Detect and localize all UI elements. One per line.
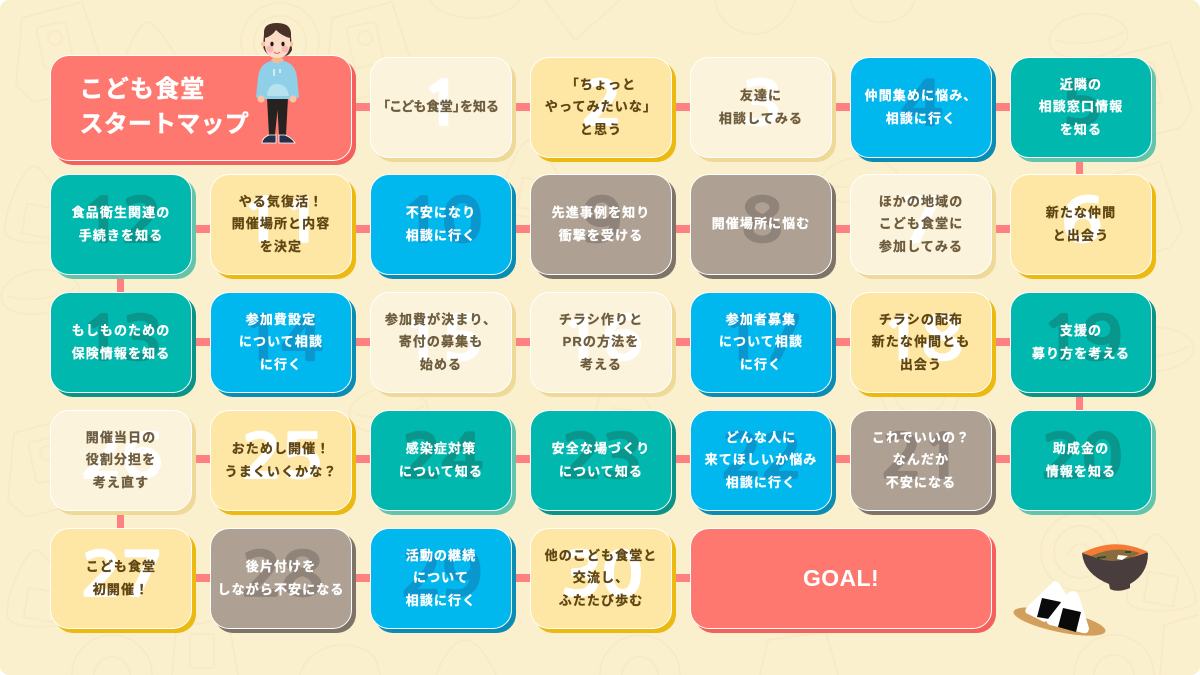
step 1: 1 [421, 75, 461, 134]
step 9: 先進事例を知り [552, 205, 650, 220]
step 10 [370, 174, 516, 279]
step 20: 20 [1041, 428, 1121, 487]
step 3: 相談してみる [719, 110, 803, 126]
step 11: を決定 [260, 239, 302, 254]
step 6: 新たな仲間 [1046, 205, 1116, 220]
step 15 [370, 292, 516, 397]
step 21: 不安になる [886, 475, 956, 490]
step 24 [370, 410, 516, 515]
step 28: しながら不安になる [218, 582, 344, 596]
step 11: 11 [241, 192, 321, 251]
connector path [51, 57, 1156, 634]
character: person in blue hoodie [256, 23, 299, 144]
step 14: 14 [241, 310, 321, 369]
step 22: 来てほしいか悩み [705, 452, 817, 467]
step 13: もしものための [72, 323, 170, 338]
step 26: 26 [81, 428, 161, 487]
step 11 [210, 174, 356, 279]
step 26 [50, 410, 196, 515]
step 21: これでいいの？ [872, 430, 970, 445]
step 9 [530, 174, 676, 279]
step 16 [530, 292, 676, 397]
step 23: 23 [561, 428, 641, 487]
step 18: 出会う [900, 357, 942, 372]
step 23: 安全な場づくり [552, 441, 650, 456]
step 4 [850, 57, 996, 162]
step 19 [1010, 292, 1156, 397]
goal panel: GOAL! [803, 565, 879, 591]
step 16: 16 [561, 310, 641, 369]
step 6 [1010, 174, 1156, 279]
step 26: 考え直す [93, 475, 149, 490]
step 14: 参加費設定 [246, 312, 316, 327]
title: こども食堂 [80, 76, 206, 103]
step 22: 相談に行く [726, 475, 796, 490]
step 7 [850, 174, 996, 279]
step 2: と思う [580, 122, 622, 137]
step 27: こども食堂 [86, 559, 156, 574]
step 21 [850, 410, 996, 515]
step 20: 情報を知る [1046, 464, 1116, 478]
step 27: 27 [81, 546, 161, 605]
step 15: 寄付の募集も [399, 334, 483, 349]
step 30 [530, 528, 676, 633]
step 17 [690, 292, 836, 397]
step 17: 17 [721, 310, 801, 369]
step 7: ほかの地域の [879, 194, 963, 209]
step 30: 他のこども食堂と [545, 548, 657, 563]
step 3 [690, 57, 836, 162]
step 15: 参加費が決まり、 [385, 312, 497, 327]
step 28 [210, 528, 356, 633]
step 17: 参加者募集 [726, 312, 796, 327]
step 26: 開催当日の [86, 430, 156, 445]
step 1 [370, 57, 516, 162]
step 15: 15 [401, 310, 481, 369]
step 9: 衝撃を受ける [559, 228, 643, 242]
step 17: について相談 [719, 334, 803, 349]
step 5: を知る [1060, 122, 1102, 137]
step 2: 2 [581, 75, 621, 134]
step 16: チラシ作りと [559, 312, 643, 327]
step 18: チラシの配布 [879, 312, 963, 327]
step 11: 開催場所と内容 [232, 216, 330, 231]
step 25 [210, 410, 356, 515]
step 16: PRの方法を [563, 334, 639, 349]
step 20 [1010, 410, 1156, 515]
step 19: 募り方を考える [1032, 346, 1130, 360]
step 23 [530, 410, 676, 515]
step 17: に行く [740, 357, 782, 372]
title panel [50, 55, 356, 165]
step 2: 「ちょっと [566, 77, 636, 92]
step 10: 10 [401, 192, 481, 251]
step 24: について知る [399, 464, 483, 478]
step 7: 7 [901, 192, 941, 251]
step 15: 始める [420, 357, 462, 372]
step 19: 19 [1041, 310, 1121, 369]
step 22 [690, 410, 836, 515]
step 7: こども食堂に [879, 216, 963, 231]
goal panel [690, 528, 996, 633]
step 1: 「こども食堂」を知る [383, 99, 499, 114]
step 25: おためし開催！ [232, 441, 330, 456]
step 14 [210, 292, 356, 397]
step 22: どんな人に [726, 430, 796, 445]
step 3: 3 [741, 75, 781, 134]
step 25: うまくいくかな？ [225, 464, 337, 478]
step 4: 4 [901, 75, 941, 134]
step 6: 6 [1061, 192, 1101, 251]
step 5 [1010, 57, 1156, 162]
step 30: 30 [561, 546, 641, 605]
step 24: 感染症対策 [406, 441, 476, 456]
step 5: 5 [1061, 75, 1101, 134]
step 14: について相談 [239, 334, 323, 349]
step 27: 初開催！ [93, 582, 149, 596]
step 29: 相談に行く [406, 593, 476, 608]
step 25: 25 [241, 428, 321, 487]
step 12: 手続きを知る [79, 228, 163, 242]
step 29 [370, 528, 516, 633]
step 28: 後片付けを [246, 559, 316, 574]
step 20: 助成金の [1053, 441, 1109, 456]
step 12: 食品衛生関連の [72, 205, 170, 220]
step 6: と出会う [1053, 228, 1109, 242]
step 13: 13 [81, 310, 161, 369]
step 8: 8 [741, 192, 781, 251]
step 24: 24 [401, 428, 481, 487]
step 5: 相談窓口情報 [1039, 99, 1123, 114]
step 22: 22 [721, 428, 801, 487]
step 13 [50, 292, 196, 397]
step 13: 保険情報を知る [72, 346, 170, 360]
step 16: 考える [580, 357, 622, 372]
step 29: について [413, 570, 469, 585]
step 18: 新たな仲間とも [872, 334, 970, 349]
step 8: 開催場所に悩む [712, 216, 810, 231]
step 18: 18 [881, 310, 961, 369]
step 12 [50, 174, 196, 279]
step 21: 21 [881, 428, 961, 487]
step 2: やってみたいな」 [545, 99, 657, 114]
step 29: 活動の継続 [406, 548, 476, 563]
step 3: 友達に [740, 88, 782, 103]
step 28: 28 [241, 546, 321, 605]
title: スタートマップ [80, 111, 249, 138]
step 9: 9 [581, 192, 621, 251]
step 7: 参加してみる [879, 239, 963, 254]
step 18 [850, 292, 996, 397]
step 30: ふたたび歩む [559, 593, 643, 608]
step 29: 29 [401, 546, 481, 605]
step 10: 不安になり [406, 205, 476, 220]
step 10: 相談に行く [406, 228, 476, 242]
step 19: 支援の [1060, 323, 1102, 338]
icon: miso soup bowl [1082, 544, 1148, 591]
step 4: 相談に行く [886, 110, 956, 126]
step 27 [50, 528, 196, 633]
step 2 [530, 57, 676, 162]
step 21: なんだか [893, 452, 949, 467]
step 26: 役割分担を [86, 452, 156, 467]
step 5: 近隣の [1060, 77, 1102, 92]
step 14: に行く [260, 357, 302, 372]
title [80, 76, 249, 138]
step 4: 仲間集めに悩み、 [865, 88, 977, 103]
step 11: やる気復活！ [239, 194, 323, 209]
step 30: 交流し、 [573, 570, 629, 585]
icon: onigiri on plate [1014, 581, 1106, 636]
step 23: について知る [559, 464, 643, 478]
step 8 [690, 174, 836, 279]
step 12: 12 [81, 192, 161, 251]
